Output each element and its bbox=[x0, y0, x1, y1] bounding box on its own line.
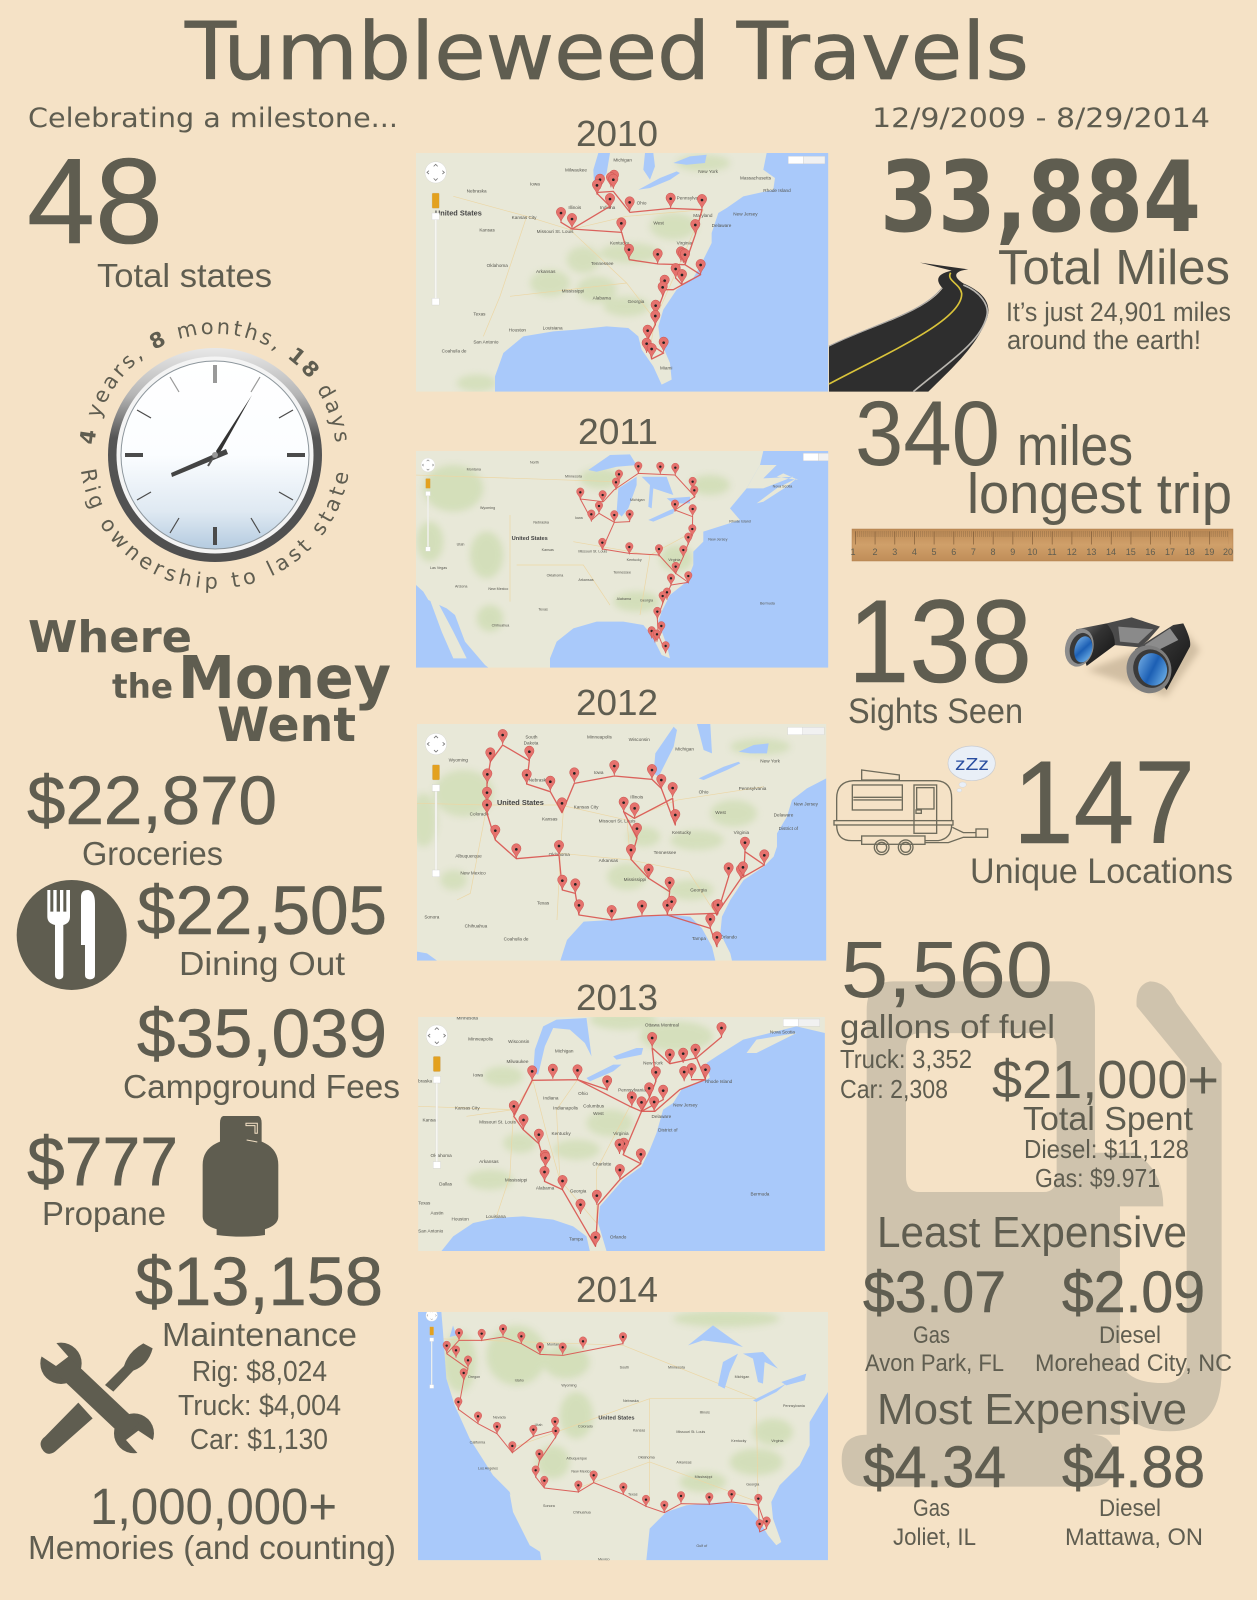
stat: gallons of fuel bbox=[840, 925, 1055, 1104]
panel: most expensive fuel: $4.88 bbox=[1062, 1435, 1205, 1500]
panel: least expensive fuel: $2.09 bbox=[1062, 1260, 1205, 1325]
map: 2013 route: Columbus bbox=[583, 1103, 605, 1108]
heading: 2014: 2014 bbox=[576, 1269, 658, 1310]
map: 2012 route: New Jersey bbox=[794, 801, 819, 806]
stat: gallons of fuel: Car: 2,308 bbox=[840, 1074, 948, 1104]
heading: where the money went: Where bbox=[28, 612, 192, 663]
map: 2010 route: Arkansas bbox=[536, 269, 556, 274]
map: 2012 route: Dakota bbox=[524, 740, 539, 745]
stat: maintenance: Maintenance bbox=[162, 1316, 357, 1353]
icon: ruler: 15 bbox=[1126, 547, 1136, 557]
map: 2014 route: Oklahoma bbox=[638, 1456, 656, 1460]
map: 2013 route: Dallas bbox=[439, 1182, 453, 1187]
map: 2012 route: New York bbox=[760, 759, 781, 764]
map: 2012 route: Missouri St. Louis bbox=[599, 818, 636, 823]
panel: most expensive fuel: Most Expensive bbox=[877, 1385, 1187, 1434]
map: 2012 route: Tennessee bbox=[654, 850, 677, 855]
map: 2013 route: Kansas bbox=[422, 1118, 439, 1123]
icon: ruler: 2 bbox=[872, 547, 878, 557]
stat: maintenance bbox=[135, 1243, 383, 1456]
map: 2014 route: Los Angeles bbox=[478, 1466, 498, 1470]
map: 2011 route: Kentucky bbox=[627, 558, 642, 562]
map: 2013 route: Wisconsin bbox=[508, 1039, 530, 1044]
panel: least expensive fuel: Least Expensive bbox=[877, 1208, 1187, 1257]
map: 2013 route: Alabama bbox=[536, 1186, 555, 1191]
stat: longest trip: miles bbox=[1017, 414, 1133, 478]
title: Tumbleweed Travels bbox=[184, 6, 1029, 98]
map: 2011 route: Georgia bbox=[640, 599, 654, 603]
stat: total spent on fuel: Gas: $9.971 bbox=[1035, 1163, 1160, 1193]
panel: most expensive fuel: $4.34 bbox=[863, 1435, 1006, 1500]
map: 2014 route: Kentucky bbox=[731, 1439, 747, 1443]
map: 2014 route: Colorado bbox=[578, 1425, 593, 1429]
text: date range: 12/9/2009 - 8/29/2014 bbox=[872, 103, 1210, 134]
map: 2012 route: District of bbox=[779, 826, 799, 831]
map: 2010 route: Kansas City bbox=[512, 215, 537, 220]
map: 2010 route bbox=[416, 153, 828, 392]
map: 2012 route: Nebraska bbox=[529, 778, 549, 783]
stat: total miles bbox=[880, 141, 1231, 355]
map: 2012 route: United States bbox=[497, 798, 544, 807]
map: 2014 route: Albuquerque bbox=[566, 1457, 587, 1461]
stat: propane: Propane bbox=[42, 1195, 166, 1232]
map: 2014 route: Sonora bbox=[543, 1504, 556, 1508]
map: 2014 route: Mexico bbox=[598, 1557, 610, 1561]
map: 2010 route: Alabama bbox=[593, 296, 611, 301]
stat: total miles: around the earth! bbox=[1007, 325, 1201, 355]
stat: gallons of fuel: 5,560 bbox=[841, 925, 1053, 1014]
stat: groceries bbox=[27, 762, 277, 872]
map: 2010 route: Illinois bbox=[568, 205, 582, 210]
map: 2010 route: Houston bbox=[509, 327, 526, 332]
map: 2014 route: Arkansas bbox=[676, 1461, 692, 1465]
stat: unique locations bbox=[970, 737, 1233, 891]
map: 2013 route: Ohio bbox=[578, 1091, 588, 1096]
heading: where the money went: Went bbox=[217, 698, 356, 753]
icon: ruler: 9 bbox=[1010, 547, 1015, 557]
icon: ruler: 5 bbox=[931, 547, 937, 557]
curved caption: 4 years, 8 months, 18 days bbox=[80, 320, 347, 444]
map: 2013 route: Kentucky bbox=[552, 1131, 571, 1136]
map: 2013 route: Ottawa Montreal bbox=[645, 1022, 679, 1027]
heading: where the money went bbox=[28, 612, 391, 753]
icon: thought bubble bbox=[948, 746, 995, 792]
map: 2011 route bbox=[416, 451, 828, 668]
stat: groceries: $22,870 bbox=[27, 762, 277, 839]
stat: memories bbox=[28, 1478, 396, 1566]
heading: where the money went: Money bbox=[178, 643, 391, 712]
map: 2010 route: West bbox=[653, 220, 665, 225]
panel: most expensive fuel: Diesel bbox=[1099, 1495, 1161, 1522]
map: 2012 route: Arkansas bbox=[599, 858, 619, 863]
map: 2013 route: San Antonio bbox=[418, 1228, 444, 1233]
clock with curved caption bbox=[80, 320, 348, 593]
map: 2013 route: Nova Scotia bbox=[770, 1030, 795, 1035]
stat: total states: 48 bbox=[27, 133, 163, 269]
map: 2012 route: Mississippi bbox=[624, 877, 646, 882]
stat: total miles: It’s just 24,901 miles bbox=[1006, 297, 1231, 327]
map: 2014 route: Oregon bbox=[468, 1375, 480, 1379]
icon: clock bbox=[108, 348, 322, 562]
map: 2013 route: braska bbox=[418, 1078, 433, 1083]
icon: binoculars bbox=[1061, 617, 1200, 698]
map: 2011 route: New Jersey bbox=[708, 538, 728, 542]
map: 2010 route: Michigan bbox=[613, 157, 632, 162]
map: 2012 route: Kansas City bbox=[574, 805, 599, 810]
map: 2010 route: Pennsylvania bbox=[677, 196, 705, 201]
map: 2011 route: New Mexico bbox=[488, 587, 508, 591]
map: 2012 route: Sonora bbox=[424, 914, 440, 919]
icon: ruler: 8 bbox=[990, 547, 996, 557]
map: 2014 route: Montana bbox=[547, 1342, 562, 1346]
map: 2013 route: West bbox=[593, 1111, 604, 1116]
map: 2013 route: Georgia bbox=[570, 1189, 587, 1194]
map: 2012 route: Minneapolis bbox=[587, 734, 613, 739]
stat: maintenance: Car: $1,130 bbox=[190, 1424, 328, 1456]
map: 2013 route: Minneapolis bbox=[468, 1037, 494, 1042]
map: 2013 route: Houston bbox=[452, 1216, 469, 1221]
map: 2013 route: Kansas City bbox=[455, 1106, 480, 1111]
map: 2012 route: Orlando bbox=[720, 934, 737, 939]
map: 2014 route: Wyoming bbox=[561, 1383, 577, 1387]
map: 2010 route: Ohio bbox=[637, 200, 647, 205]
map: 2013 route: Mississippi bbox=[505, 1178, 527, 1183]
map: 2013 route: Michigan bbox=[555, 1048, 574, 1053]
map: 2011 route: Montana bbox=[467, 467, 482, 471]
map: 2013 route: Virginia bbox=[613, 1131, 629, 1136]
stat: longest trip bbox=[855, 383, 1232, 526]
map: 2011 route: Nebraska bbox=[533, 520, 550, 524]
stat: total spent on fuel: Total Spent bbox=[1023, 1100, 1193, 1137]
map: 2010 route: Tennessee bbox=[591, 261, 614, 266]
map: 2011 route: Utah bbox=[457, 543, 464, 547]
icon: thought bubble: zZz bbox=[955, 754, 989, 774]
map: 2013 route: Iowa bbox=[473, 1072, 483, 1077]
map: 2013 route: New Jersey bbox=[673, 1102, 698, 1107]
map: 2014 route: Mississippi bbox=[695, 1475, 713, 1479]
map: 2013 route: Milwaukee bbox=[506, 1059, 529, 1064]
stat: groceries: Groceries bbox=[82, 835, 223, 872]
map: 2011 route: Tennessee bbox=[613, 570, 631, 574]
map: 2013 route: Arkansas bbox=[479, 1159, 499, 1164]
map: 2011 route: Minnesota bbox=[565, 474, 583, 478]
map: 2010 route: Coahuila de bbox=[442, 348, 467, 353]
map: 2012 route: Pennsylvania bbox=[739, 786, 767, 791]
map: 2011 route: Alabama bbox=[617, 597, 632, 601]
map: 2011 route: Michigan bbox=[630, 498, 645, 502]
map: 2014 route: Illinois bbox=[700, 1411, 710, 1415]
heading: 2011: 2011 bbox=[578, 411, 658, 452]
icon: ruler: 18 bbox=[1185, 547, 1195, 557]
map: 2010 route: Mississippi bbox=[562, 288, 584, 293]
map: 2010 route: United States bbox=[435, 209, 482, 218]
map: 2014 route: Missouri St. Louis bbox=[676, 1430, 705, 1434]
heading: 2013: 2013 bbox=[576, 977, 658, 1018]
map: 2010 route: Miami bbox=[660, 366, 672, 371]
map: 2012 route: Illinois bbox=[630, 794, 644, 799]
stat: dining out: $22,505 bbox=[137, 872, 387, 949]
map: 2011 route: Oklahoma bbox=[547, 574, 564, 578]
map: 2010 route: Iowa bbox=[530, 181, 540, 186]
stat: memories: 1,000,000+ bbox=[90, 1478, 337, 1535]
panel: least expensive fuel: Diesel bbox=[1099, 1322, 1161, 1349]
map: 2012 route: Ohio bbox=[699, 789, 709, 794]
stat: total states: Total states bbox=[97, 257, 272, 294]
heading: 2010: 2010 bbox=[576, 113, 658, 154]
map: 2013 route: Oklahoma bbox=[431, 1153, 452, 1158]
icon: ruler: 11 bbox=[1047, 547, 1057, 557]
icon: ruler: 17 bbox=[1165, 547, 1175, 557]
icon: winding road bbox=[829, 263, 988, 392]
icon: fork and knife bbox=[17, 880, 127, 990]
icon: ruler: 6 bbox=[951, 547, 956, 557]
map: 2014 route: Nebraska bbox=[623, 1399, 640, 1403]
stat: sights seen: Sights Seen bbox=[848, 692, 1023, 731]
map: 2012 route: Georgia bbox=[690, 888, 707, 893]
map: 2013 route: Missouri St. Louis bbox=[479, 1120, 517, 1125]
map: 2012 route: Wisconsin bbox=[629, 737, 650, 742]
map: 2013 route: Pennsylvania bbox=[618, 1088, 646, 1093]
stat: memories: Memories (and counting) bbox=[28, 1529, 396, 1566]
panel: most expensive fuel: Mattawa, ON bbox=[1065, 1524, 1203, 1551]
map: 2013 route: District of bbox=[658, 1128, 678, 1133]
clock with curved caption: Rig ownership to last state bbox=[81, 469, 348, 593]
map: 2013 route: New York bbox=[643, 1061, 664, 1066]
map: 2010 route: Kentucky bbox=[610, 241, 630, 246]
map: 2010 route: Nebraska bbox=[467, 188, 487, 193]
map: 2011 route: United States bbox=[512, 536, 548, 542]
icon: wrench and screwdriver bbox=[35, 1337, 160, 1460]
map: 2012 route: Texas bbox=[537, 900, 550, 905]
map: 2014 route: Nevada bbox=[493, 1416, 507, 1420]
heading: 2012: 2012 bbox=[576, 682, 658, 723]
map: 2012 route: West bbox=[715, 810, 727, 815]
icon: ruler: 13 bbox=[1086, 547, 1096, 557]
stat: maintenance: Rig: $8,024 bbox=[192, 1356, 327, 1388]
map: 2013 route: Rhode Island bbox=[705, 1079, 733, 1084]
map: 2014 route: United States bbox=[598, 1416, 634, 1422]
panel: most expensive fuel bbox=[863, 1385, 1205, 1551]
stat: campground fees: $35,039 bbox=[137, 995, 387, 1072]
map: 2014 route: Minnesota bbox=[668, 1366, 686, 1370]
map: 2012 route: Wyoming bbox=[449, 758, 468, 763]
map: 2014 route: California bbox=[470, 1441, 486, 1445]
stat: total spent on fuel: Diesel: $11,128 bbox=[1024, 1134, 1189, 1164]
panel: most expensive fuel: Joliet, IL bbox=[893, 1524, 976, 1551]
panel: least expensive fuel: Morehead City, NC bbox=[1035, 1350, 1232, 1377]
map: 2011 route: Texas bbox=[538, 608, 548, 612]
map: 2011 route: Wyoming bbox=[480, 506, 495, 510]
map: 2014 route: Michigan bbox=[735, 1375, 749, 1379]
map: 2010 route: Maryland bbox=[693, 213, 713, 218]
map: 2011 route: Nova Scotia bbox=[773, 484, 793, 488]
map: 2010 route: Texas bbox=[473, 312, 486, 317]
icon: fuel pump watermark bbox=[842, 981, 1222, 1487]
icon: ruler bbox=[850, 529, 1233, 561]
map: 2010 route: San Antonio bbox=[473, 340, 499, 345]
stat: total miles: 33,884 bbox=[880, 141, 1201, 255]
panel: least expensive fuel: Avon Park, FL bbox=[865, 1350, 1004, 1377]
map: 2010 route: Louisiana bbox=[543, 326, 563, 331]
map: 2012 route: Kentucky bbox=[672, 830, 692, 835]
map: 2014 route: Texas bbox=[628, 1492, 638, 1496]
map: 2010 route: Rhode Island bbox=[763, 188, 791, 193]
panel: least expensive fuel: Gas bbox=[913, 1322, 950, 1349]
icon: ruler: 7 bbox=[971, 547, 976, 557]
map: 2014 route: South bbox=[620, 1366, 629, 1370]
map: 2014 route: Idaho bbox=[515, 1378, 524, 1382]
panel: least expensive fuel bbox=[863, 1208, 1232, 1377]
map: 2012 route: Coahuila de bbox=[504, 937, 529, 942]
map: 2010 route: Georgia bbox=[628, 299, 645, 304]
stat: unique locations: Unique Locations bbox=[970, 852, 1233, 891]
stat: campground fees bbox=[123, 995, 400, 1105]
stat: longest trip: 340 bbox=[855, 383, 1000, 485]
map: 2012 route: Albuquerque bbox=[455, 854, 482, 859]
map: 2011 route: Virginia bbox=[668, 558, 681, 562]
icon: propane tank bbox=[203, 1116, 278, 1237]
map: 2014 route: Kansas bbox=[633, 1428, 645, 1432]
map: 2012 route: Oklahoma bbox=[549, 852, 570, 857]
map: 2011 route: Bermuda bbox=[760, 601, 776, 605]
map: 2013 route: Charlotte bbox=[592, 1162, 612, 1167]
map: 2011 route: Chihuahua bbox=[492, 624, 510, 628]
stat: total miles: Total Miles bbox=[998, 241, 1230, 295]
stat: gallons of fuel: gallons of fuel bbox=[840, 1008, 1055, 1045]
stat: total spent on fuel: $21,000+ bbox=[992, 1050, 1219, 1110]
map: 2010 route: Kansas bbox=[479, 227, 496, 232]
map: 2013 route: Indianapolis bbox=[553, 1106, 579, 1111]
map: 2010 route: Indiana bbox=[600, 205, 616, 210]
stat: total spent on fuel bbox=[992, 1050, 1219, 1193]
stat: propane: $777 bbox=[27, 1123, 178, 1200]
icon: ruler: 16 bbox=[1145, 547, 1155, 557]
map: 2010 route: Oklahoma bbox=[487, 263, 508, 268]
map: 2012 route: Kansas bbox=[542, 817, 558, 822]
map: 2013 route: Minnesota bbox=[456, 1015, 478, 1020]
map: 2010 route: Massachusetts bbox=[740, 176, 772, 181]
icon: ruler: 10 bbox=[1027, 547, 1037, 557]
map: 2012 route: Chihuahua bbox=[465, 923, 488, 928]
map: 2014 route: New Mexico bbox=[571, 1470, 591, 1474]
map: 2012 route bbox=[417, 724, 826, 961]
stat: maintenance: Truck: $4,004 bbox=[178, 1390, 341, 1422]
stat: longest trip: longest trip bbox=[967, 462, 1232, 526]
icon: ruler: 3 bbox=[892, 547, 897, 557]
map: 2010 route: New York bbox=[698, 169, 719, 174]
icon: ruler: 14 bbox=[1106, 547, 1116, 557]
map: 2014 route: Utah bbox=[535, 1423, 542, 1427]
map: 2010 route: Virginia bbox=[677, 241, 693, 246]
icon: ruler: 20 bbox=[1223, 547, 1233, 557]
map: 2010 route: Missouri St. Louis bbox=[537, 229, 574, 234]
text: tagline: Celebrating a milestone... bbox=[28, 103, 398, 134]
map: 2014 route: Chihuahua bbox=[573, 1511, 592, 1515]
map: 2012 route: Colorado bbox=[470, 812, 489, 817]
map: 2014 route: Pennsylvania bbox=[783, 1404, 806, 1408]
panel: most expensive fuel: Gas bbox=[913, 1495, 950, 1522]
map: 2013 route: Bermuda bbox=[751, 1191, 770, 1196]
map: 2012 route: South bbox=[525, 734, 538, 739]
map: 2013 route: Louisiana bbox=[486, 1214, 506, 1219]
stat: dining out bbox=[137, 872, 387, 982]
stat: campground fees: Campground Fees bbox=[123, 1068, 400, 1105]
map: 2010 route: Delaware bbox=[712, 223, 732, 228]
map: 2014 route: Gulf of bbox=[696, 1544, 708, 1548]
icon: ruler: 4 bbox=[912, 547, 917, 557]
map: 2011 route: Iowa bbox=[575, 516, 584, 520]
map: 2012 route: Delaware bbox=[774, 813, 794, 818]
map: 2013 route: Texas bbox=[418, 1201, 431, 1206]
map: 2011 route: Missouri St. Louis bbox=[578, 550, 607, 554]
icon: ruler: 19 bbox=[1204, 547, 1214, 557]
panel: least expensive fuel: $3.07 bbox=[863, 1260, 1006, 1325]
stat: maintenance: $13,158 bbox=[135, 1243, 383, 1320]
map: 2011 route: Rhode Island bbox=[729, 520, 751, 524]
map: 2011 route: Las Vegas bbox=[430, 566, 447, 570]
map: 2013 route bbox=[418, 1015, 825, 1251]
stat: sights seen: 138 bbox=[848, 576, 1032, 708]
map: 2014 route: Georgia bbox=[746, 1482, 760, 1486]
stat: total states bbox=[27, 133, 272, 294]
stat: propane bbox=[27, 1123, 178, 1232]
map: 2010 route: Milwaukee bbox=[565, 168, 587, 173]
map: 2011 route: Kansas bbox=[542, 548, 554, 552]
map: 2011 route: Arkansas bbox=[578, 578, 594, 582]
map: 2011 route: North bbox=[530, 460, 539, 464]
map: 2014 route: Virginia bbox=[771, 1439, 784, 1443]
icon: sleeping trailer bbox=[834, 746, 995, 855]
map: 2012 route: Virginia bbox=[734, 830, 749, 835]
icon: ruler: 12 bbox=[1067, 547, 1077, 557]
map: 2011 route: Arizona bbox=[455, 585, 468, 589]
map: 2013 route: Indiana bbox=[543, 1096, 559, 1101]
map: 2012 route: Iowa bbox=[594, 770, 604, 775]
map: 2014 route bbox=[418, 1312, 828, 1561]
map: 2012 route: Michigan bbox=[675, 747, 694, 752]
stat: dining out: Dining Out bbox=[179, 945, 345, 982]
icon: ruler: 1 bbox=[850, 547, 856, 557]
stat: gallons of fuel: Truck: 3,352 bbox=[840, 1044, 972, 1074]
map: 2012 route: New Mexico bbox=[460, 870, 486, 875]
map: 2012 route: Tampa bbox=[692, 936, 706, 941]
map: 2013 route: Austin bbox=[431, 1211, 444, 1216]
map: 2010 route: New Jersey bbox=[733, 212, 758, 217]
map: 2013 route: Tampa bbox=[569, 1236, 584, 1241]
heading: where the money went: the bbox=[112, 667, 173, 707]
map: 2013 route: Orlando bbox=[610, 1234, 627, 1239]
stat: unique locations: 147 bbox=[1013, 737, 1195, 869]
map: 2013 route: Delaware bbox=[652, 1114, 672, 1119]
